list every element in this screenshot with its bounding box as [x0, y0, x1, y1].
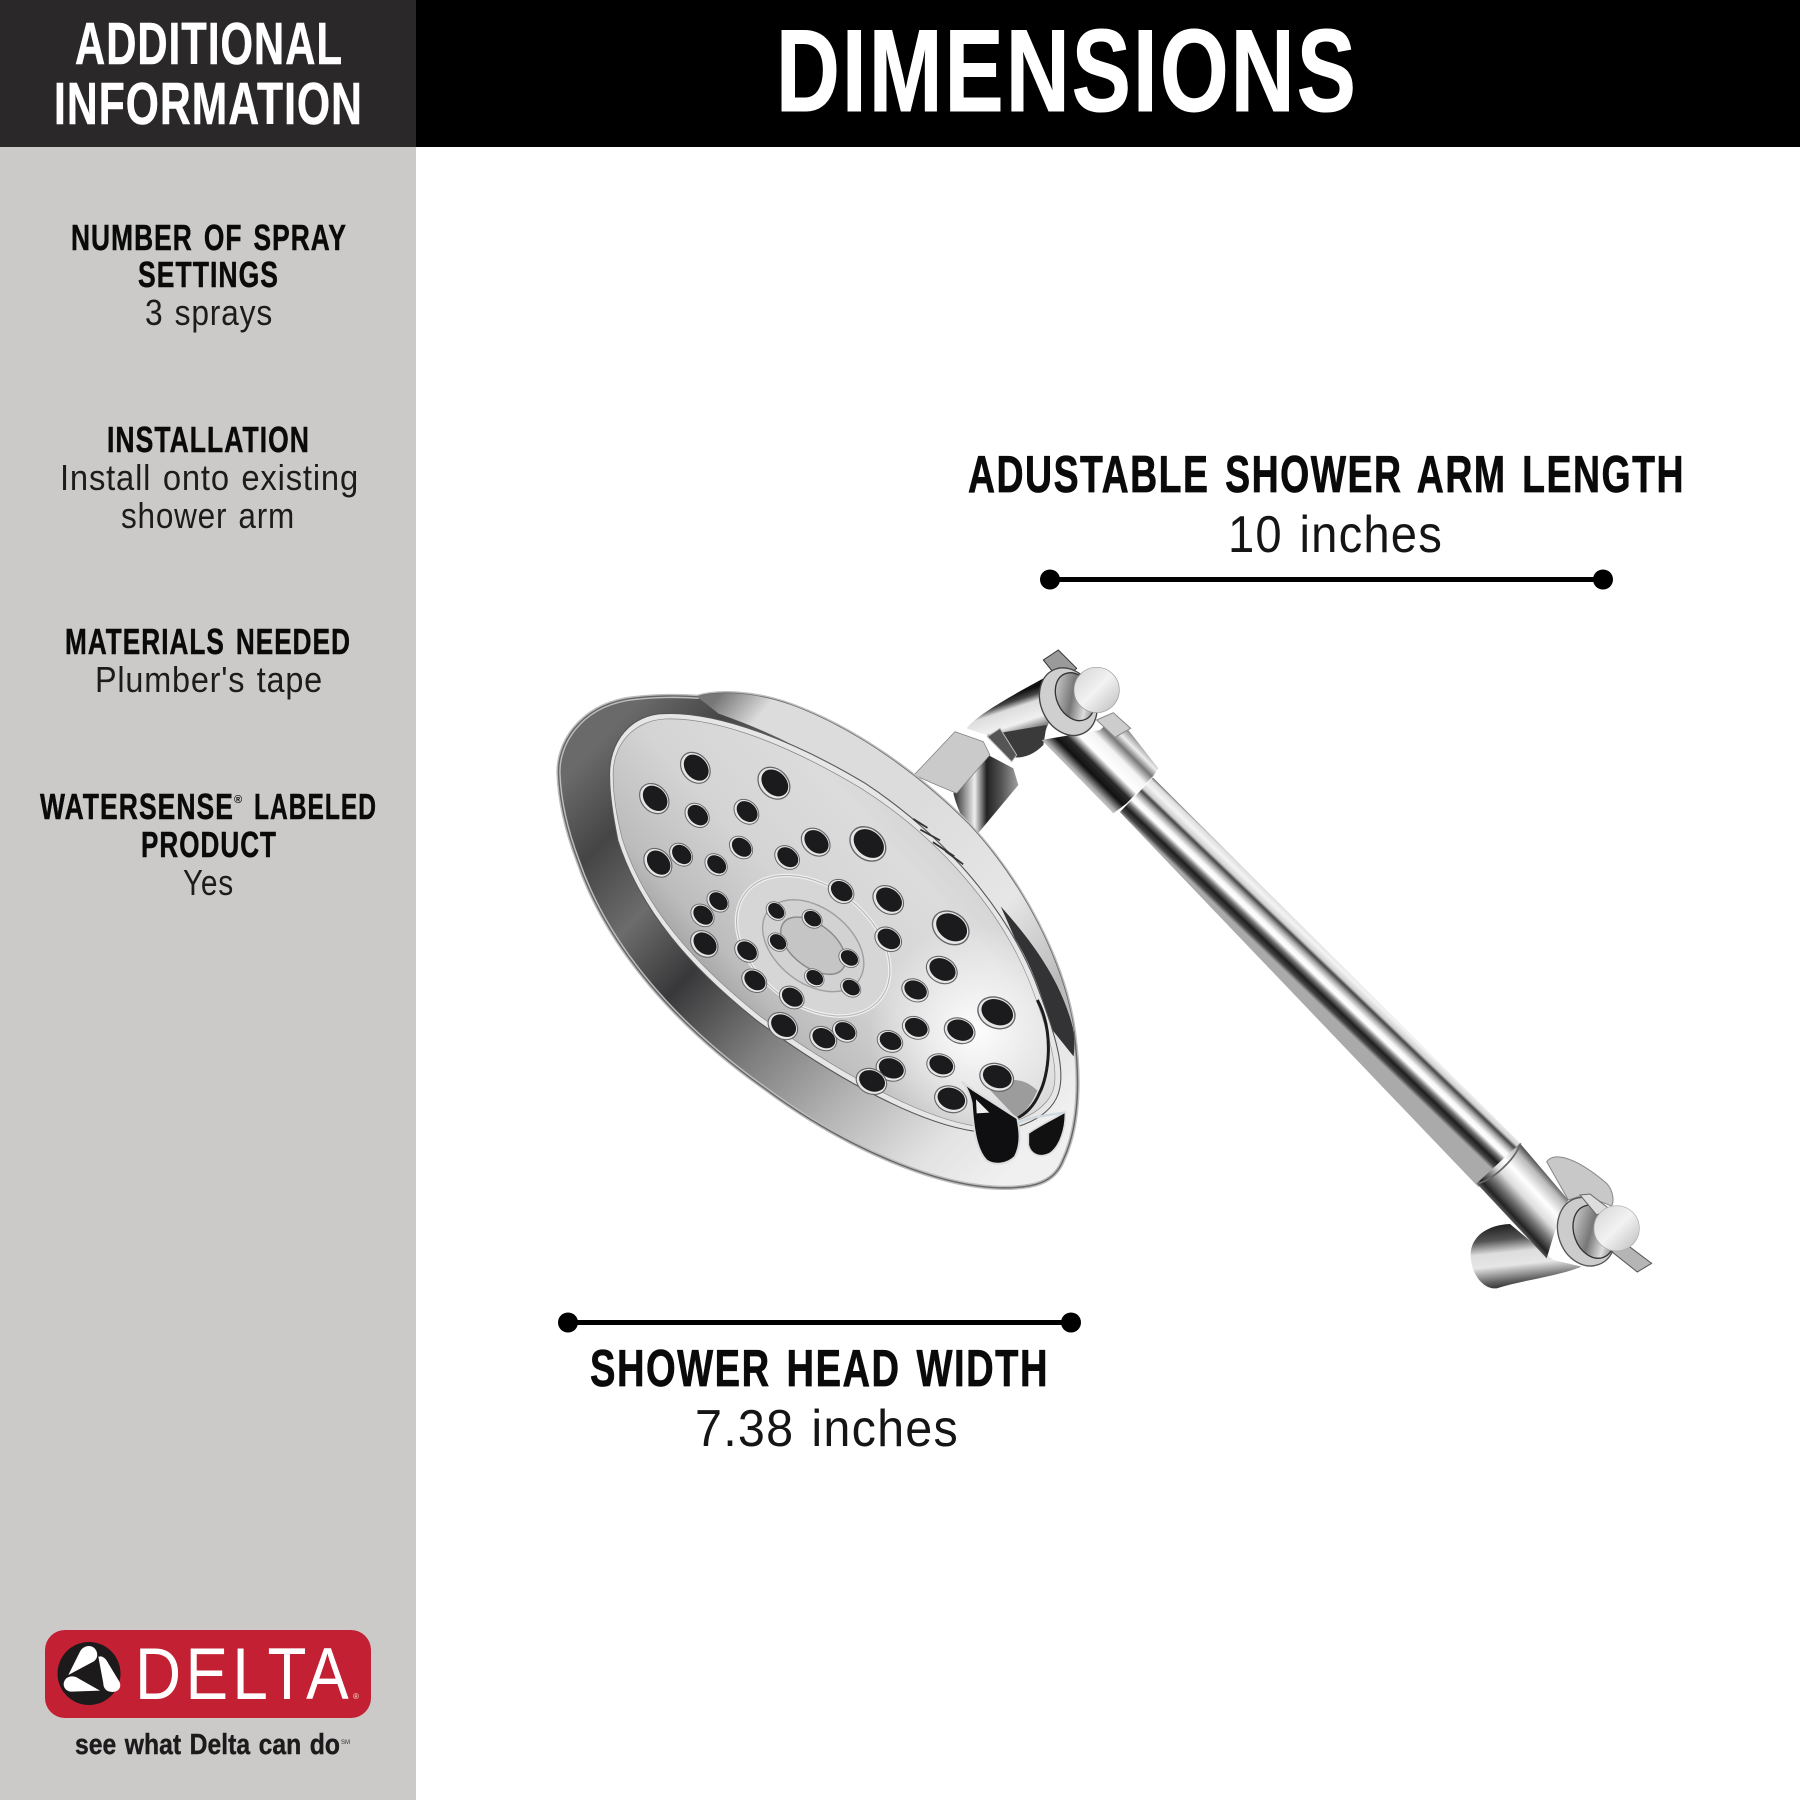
info block: watersense labeled product: ®	[234, 794, 242, 806]
info block: materials needed	[65, 621, 351, 700]
header bar: additional information: ADDITIONAL	[75, 11, 343, 77]
arm length label: 10 inches	[1228, 506, 1443, 564]
info block: number of spray settings: NUMBER OF SPRAY	[71, 217, 347, 258]
lower collar	[1477, 1143, 1568, 1258]
head back band	[697, 693, 1074, 1031]
face sheen	[613, 719, 1055, 1126]
info block: number of spray settings: 3 sprays	[145, 292, 273, 333]
inner rim curves	[1016, 1000, 1048, 1118]
delta logo: see what Delta can do	[75, 1729, 340, 1761]
info block: watersense labeled product: PRODUCT	[141, 824, 277, 865]
arm tube	[1120, 777, 1521, 1187]
head rim highlight	[610, 713, 1061, 1132]
reflection wedge	[990, 1080, 1037, 1117]
upper joint	[914, 650, 1158, 835]
rim marking	[913, 819, 963, 864]
info block: number of spray settings: SETTINGS	[138, 254, 279, 295]
dimension line: shower head width	[558, 1312, 1081, 1332]
info block: watersense labeled product: LABELED	[254, 786, 377, 827]
rim dark reflection	[1001, 906, 1074, 1056]
info block: installation	[60, 419, 359, 536]
neck dark chrome	[953, 753, 1018, 835]
shell outer edge	[559, 693, 1078, 1188]
lower knob	[1548, 1189, 1652, 1274]
delta logo: ®	[353, 1692, 359, 1701]
shower arm elbow	[967, 678, 1050, 745]
delta logo: DELTA	[135, 1634, 353, 1715]
info block: installation: Install onto existing	[60, 457, 359, 498]
water spout notch	[962, 1000, 1065, 1164]
lower barrel	[1471, 1224, 1582, 1288]
head shell	[559, 693, 1078, 1188]
shower head	[559, 693, 1078, 1188]
info block: watersense labeled product	[40, 786, 377, 903]
info block: watersense labeled product: WATERSENSE	[40, 786, 234, 827]
arm length label	[968, 446, 1685, 564]
dimension line: arm length	[1040, 570, 1613, 590]
info block: watersense labeled product: Yes	[183, 862, 234, 903]
info block: materials needed: Plumber's tape	[95, 659, 323, 700]
info block: materials needed: MATERIALS NEEDED	[65, 621, 351, 662]
sidebar panel	[0, 147, 416, 1800]
back of lower joint	[1547, 1157, 1613, 1206]
info block: number of spray settings	[71, 217, 347, 333]
spray hole above notch	[976, 1059, 1017, 1096]
header bar: additional information	[0, 0, 416, 147]
delta logo: SM	[341, 1740, 350, 1746]
upper knob	[1029, 650, 1131, 745]
center rings	[709, 847, 917, 1045]
shower head width label: SHOWER HEAD WIDTH	[590, 1340, 1049, 1398]
header bar: additional information: INFORMATION	[54, 71, 363, 137]
spray holes	[634, 747, 1020, 1117]
delta logo	[45, 1630, 371, 1761]
neck joint ring	[987, 728, 1017, 762]
right water drop	[1028, 1112, 1065, 1156]
info block: installation: shower arm	[121, 495, 295, 536]
lower joint	[1471, 1143, 1652, 1288]
collar ring	[1477, 1143, 1521, 1183]
blue streak	[1017, 1113, 1064, 1123]
header bar: dimensions title: DIMENSIONS	[776, 5, 1358, 136]
shower head width label	[590, 1340, 1049, 1458]
left water drop	[962, 1082, 1020, 1164]
info block: installation: INSTALLATION	[107, 419, 310, 460]
header bar: dimensions title	[416, 0, 1800, 147]
shower head width label: 7.38 inches	[695, 1400, 959, 1458]
joint ball	[987, 725, 1047, 757]
upper arm collar	[1042, 715, 1158, 813]
head face	[613, 719, 1055, 1126]
drop reflection	[976, 1099, 989, 1113]
neck light plate	[914, 732, 990, 793]
